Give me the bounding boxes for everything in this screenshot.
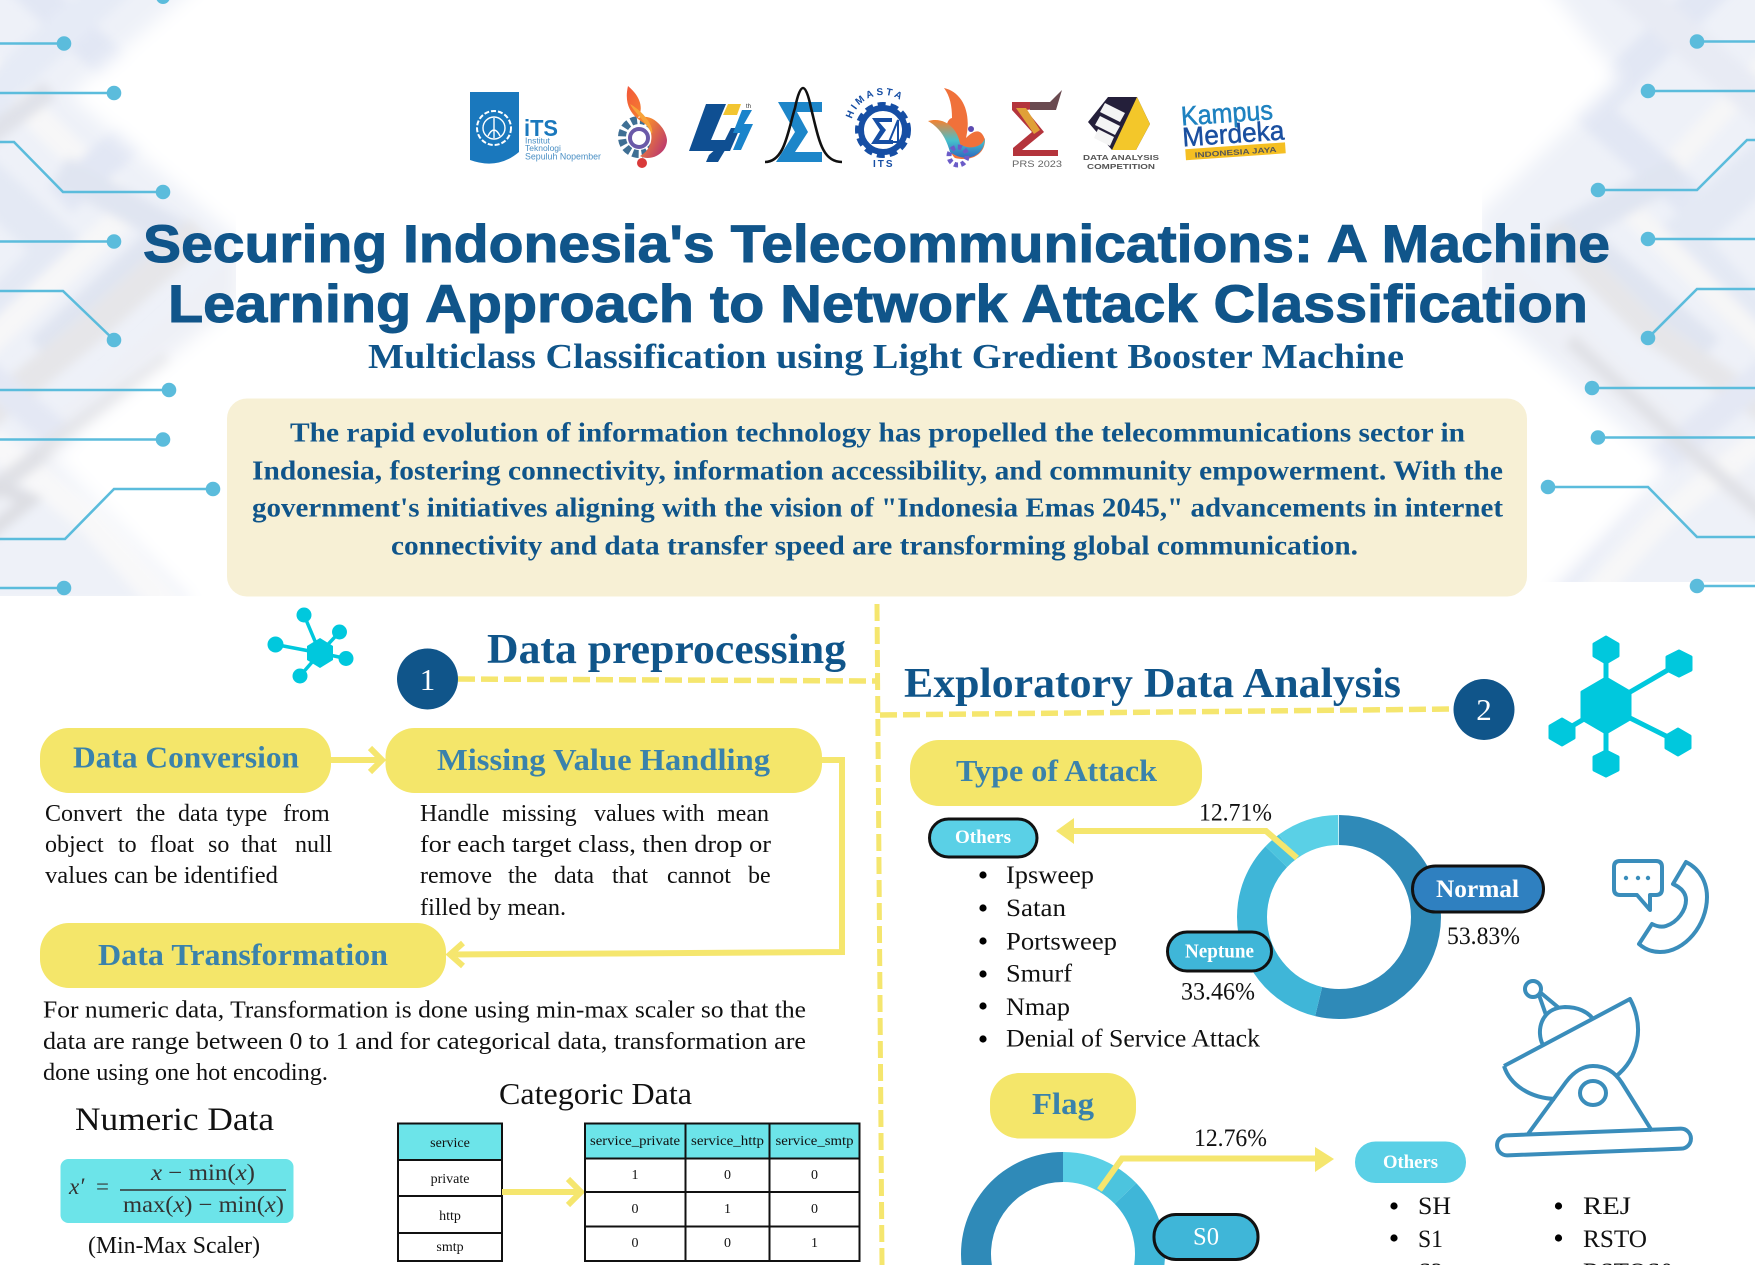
pill: Others bbox=[930, 819, 1037, 857]
text: conversion description: so bbox=[208, 832, 229, 858]
logo: HIMASTA: ITS bbox=[873, 159, 895, 170]
pill: Missing Value Handling: Missing Value Handling bbox=[437, 742, 771, 777]
logo: flame fish bbox=[928, 88, 985, 165]
list: attack types: Nmap bbox=[1006, 994, 1070, 1021]
text: missing value description: with bbox=[662, 801, 705, 827]
logo: data analysis competition bbox=[1083, 97, 1159, 171]
table: one hot encoded: service_private bbox=[590, 1134, 680, 1149]
text: conversion description: object bbox=[45, 832, 104, 858]
pill: Data Conversion bbox=[40, 728, 331, 793]
intro panel: connectivity and data transfer speed are transforming global communication. bbox=[391, 530, 1358, 560]
arrow: missing to transformation bbox=[450, 760, 842, 966]
logo: ITS bbox=[470, 92, 601, 164]
intro panel: Indonesia, fostering connectivity, information accessibility, and community empowerment. With the bbox=[252, 456, 1503, 486]
badge 1 bbox=[397, 648, 458, 710]
pill: Missing Value Handling bbox=[386, 728, 822, 793]
donut chart: flag bbox=[961, 1152, 1165, 1265]
heading: Exploratory Data Analysis: Exploratory Data Analysis bbox=[904, 661, 1401, 707]
pill: Data Conversion: Data Conversion bbox=[73, 740, 299, 774]
intro panel: The rapid evolution of information technology has propelled the telecommunications sector in bbox=[290, 418, 1465, 448]
logo: PRS 2023: PRS 2023 bbox=[1012, 159, 1062, 170]
pill: Normal bbox=[1412, 866, 1544, 912]
text: conversion description: Convert bbox=[45, 801, 123, 827]
table: one hot encoded bbox=[585, 1124, 860, 1261]
pill: Normal: Normal bbox=[1436, 876, 1519, 903]
text: transformation description: For numeric data, Transformation is done using min-max scaler so that the bbox=[43, 998, 806, 1024]
logo: Kampus Merdeka: Kampus bbox=[1180, 95, 1274, 131]
arrow: one hot encoding bbox=[502, 1179, 581, 1205]
title: Learning Approach to Network Attack Classification bbox=[168, 275, 1588, 334]
background: left chevron panel bbox=[0, 0, 250, 610]
formula: min-max scaler: x − min(x) bbox=[150, 1160, 255, 1185]
logo: data analysis competition: COMPETITION bbox=[1087, 162, 1155, 171]
badge 2: 2 bbox=[1476, 692, 1492, 727]
icon: phone with speech bubble bbox=[1614, 861, 1707, 952]
list: attack types: Ipsweep bbox=[1006, 862, 1094, 889]
pill: Data Transformation bbox=[40, 923, 446, 988]
list: attack types bbox=[979, 862, 1261, 1052]
pill: Data Transformation: Data Transformation bbox=[98, 937, 388, 972]
table: one hot encoded: 1 bbox=[811, 1236, 818, 1251]
text: conversion description: that bbox=[241, 832, 277, 858]
text: conversion description: float bbox=[150, 832, 194, 858]
text: conversion description: the bbox=[136, 801, 165, 827]
icon: satellite dish bbox=[1497, 981, 1691, 1156]
title bbox=[143, 215, 1610, 334]
pill: Flag: Flag bbox=[1032, 1086, 1095, 1121]
logo: sigma with bell curve bbox=[765, 88, 842, 162]
pill: Flag bbox=[990, 1073, 1136, 1138]
logo: ITS: Sepuluh Nopember bbox=[525, 152, 601, 162]
text: missing value description: cannot bbox=[667, 863, 731, 889]
table: one hot encoded: 0 bbox=[632, 1236, 638, 1251]
text: transformation description: done using one hot encoding. bbox=[43, 1060, 328, 1086]
heading: Data preprocessing: Data preprocessing bbox=[487, 627, 846, 673]
formula: min-max scaler bbox=[60, 1159, 294, 1223]
text: transformation description: data are range between 0 to 1 and for categorical data, transformation are bbox=[43, 1029, 806, 1055]
pill: S0: S0 bbox=[1193, 1224, 1219, 1250]
logo: Kampus Merdeka bbox=[1180, 94, 1287, 160]
label: 53.83%: 53.83% bbox=[1447, 923, 1520, 950]
table: service bbox=[398, 1124, 502, 1261]
formula: min-max scaler: = bbox=[96, 1174, 109, 1199]
text: missing value description: data bbox=[554, 863, 594, 889]
pill: S0 bbox=[1154, 1214, 1258, 1260]
arrow: conversion to missing bbox=[331, 748, 382, 772]
table: one hot encoded: 0 bbox=[632, 1202, 638, 1217]
table: service: http bbox=[439, 1209, 461, 1224]
list: flag types: RSTO bbox=[1583, 1226, 1647, 1253]
table: one hot encoded: 0 bbox=[811, 1202, 818, 1217]
pill: Neptune: Neptune bbox=[1185, 940, 1254, 962]
text: conversion description bbox=[45, 801, 333, 889]
arrow: others callout bbox=[1056, 818, 1297, 858]
table: service: smtp bbox=[436, 1240, 464, 1255]
badge 1: 1 bbox=[420, 662, 435, 697]
text: conversion description: from bbox=[283, 801, 330, 827]
list: attack types: Portsweep bbox=[1006, 928, 1117, 956]
table: one hot encoded: 0 bbox=[724, 1236, 731, 1251]
pill: Type of Attack: Type of Attack bbox=[956, 753, 1158, 788]
table: one hot encoded: service_http bbox=[691, 1134, 764, 1149]
text: missing value description: values bbox=[594, 801, 655, 827]
table: one hot encoded: 0 bbox=[811, 1168, 818, 1183]
pill: flag Others bbox=[1355, 1142, 1466, 1183]
title: Securing Indonesia's Telecommunications: A Machine bbox=[143, 215, 1610, 274]
list: attack types: Smurf bbox=[1006, 960, 1073, 988]
logo: G5 mark bbox=[689, 104, 753, 162]
icon: molecule small bbox=[268, 608, 354, 684]
text: conversion description: null bbox=[295, 832, 333, 858]
logo: Kampus Merdeka: Merdeka bbox=[1181, 115, 1286, 152]
logo: PRS 2023 bbox=[1012, 90, 1062, 170]
text: transformation description bbox=[43, 998, 806, 1086]
text: missing value description: filled by mean. bbox=[420, 895, 566, 921]
pill: Neptune bbox=[1168, 932, 1272, 971]
pill: flag Others: Others bbox=[1383, 1152, 1438, 1173]
heading: Numeric Data: Numeric Data bbox=[75, 1102, 274, 1138]
text: missing value description bbox=[420, 801, 771, 921]
logo: HIMASTA: HIMASTA bbox=[846, 88, 901, 118]
list: flag types bbox=[1390, 1193, 1673, 1265]
text: missing value description: for each target class, then drop or bbox=[420, 832, 771, 858]
heading: Categoric Data: Categoric Data bbox=[499, 1076, 692, 1111]
text: conversion description: to bbox=[118, 832, 137, 858]
table: service: service bbox=[430, 1136, 470, 1151]
badge 2 bbox=[1454, 679, 1514, 740]
logo: flame and gear bbox=[622, 86, 667, 168]
circuit lines: right bbox=[1541, 34, 1755, 593]
arrow: flag others callout bbox=[1100, 1147, 1334, 1190]
pill: Others: Others bbox=[955, 827, 1011, 848]
pill: Type of Attack bbox=[910, 740, 1202, 806]
section dividers: dashed lines bbox=[458, 604, 1453, 1265]
text: conversion description: values can be identified bbox=[45, 863, 278, 889]
formula: min-max scaler: max(x) − min(x) bbox=[123, 1192, 284, 1217]
logo: ITS: iTS bbox=[524, 115, 558, 141]
text: missing value description: remove bbox=[420, 863, 492, 889]
icon: molecule large bbox=[1550, 637, 1691, 776]
table: one hot encoded: service_smtp bbox=[776, 1134, 854, 1149]
text: missing value description: missing bbox=[502, 801, 577, 827]
logo: G5 mark: th bbox=[746, 104, 751, 110]
list: flag types: SH bbox=[1418, 1193, 1451, 1220]
table: one hot encoded: 1 bbox=[724, 1202, 731, 1217]
text: missing value description: the bbox=[508, 863, 537, 889]
label: 33.46%: 33.46% bbox=[1181, 978, 1255, 1006]
text: missing value description: mean bbox=[717, 801, 769, 827]
formula: min-max scaler: x′ bbox=[68, 1174, 85, 1199]
logo: ITS: Institut bbox=[525, 136, 551, 146]
list: flag types: S1 bbox=[1418, 1226, 1443, 1253]
logo: ITS: Teknologi bbox=[525, 143, 561, 153]
text: conversion description: type bbox=[226, 801, 267, 827]
label: 12.71%: 12.71% bbox=[1199, 800, 1272, 826]
text: missing value description: be bbox=[748, 863, 771, 889]
text: missing value description: Handle bbox=[420, 801, 489, 827]
intro panel: government's initiatives aligning with the vision of "Indonesia Emas 2045," advancements in internet bbox=[252, 492, 1503, 522]
table: service: private bbox=[431, 1172, 469, 1187]
circuit lines: left bbox=[0, 0, 220, 595]
background: right chevron panel bbox=[1482, 0, 1755, 582]
donut chart: type of attack bbox=[1252, 830, 1426, 1004]
intro panel bbox=[227, 398, 1527, 596]
list: attack types: Denial of Service Attack bbox=[1006, 1026, 1261, 1052]
text: conversion description: data bbox=[178, 801, 218, 827]
text: missing value description: that bbox=[612, 863, 648, 889]
logo: HIMASTA bbox=[846, 88, 911, 170]
caption: Min-Max Scaler: (Min-Max Scaler) bbox=[88, 1233, 260, 1259]
logo: data analysis competition: DATA ANALYSIS bbox=[1083, 153, 1159, 162]
table: one hot encoded: 1 bbox=[632, 1168, 638, 1183]
subtitle: Multiclass Classification using Light Gredient Booster Machine bbox=[368, 337, 1404, 376]
list: attack types: Satan bbox=[1006, 895, 1067, 922]
label: 12.76%: 12.76% bbox=[1194, 1125, 1267, 1152]
logo: Kampus Merdeka: INDONESIA JAYA bbox=[1194, 145, 1278, 160]
table: one hot encoded: 0 bbox=[724, 1168, 731, 1183]
list: flag types: REJ bbox=[1583, 1193, 1631, 1220]
